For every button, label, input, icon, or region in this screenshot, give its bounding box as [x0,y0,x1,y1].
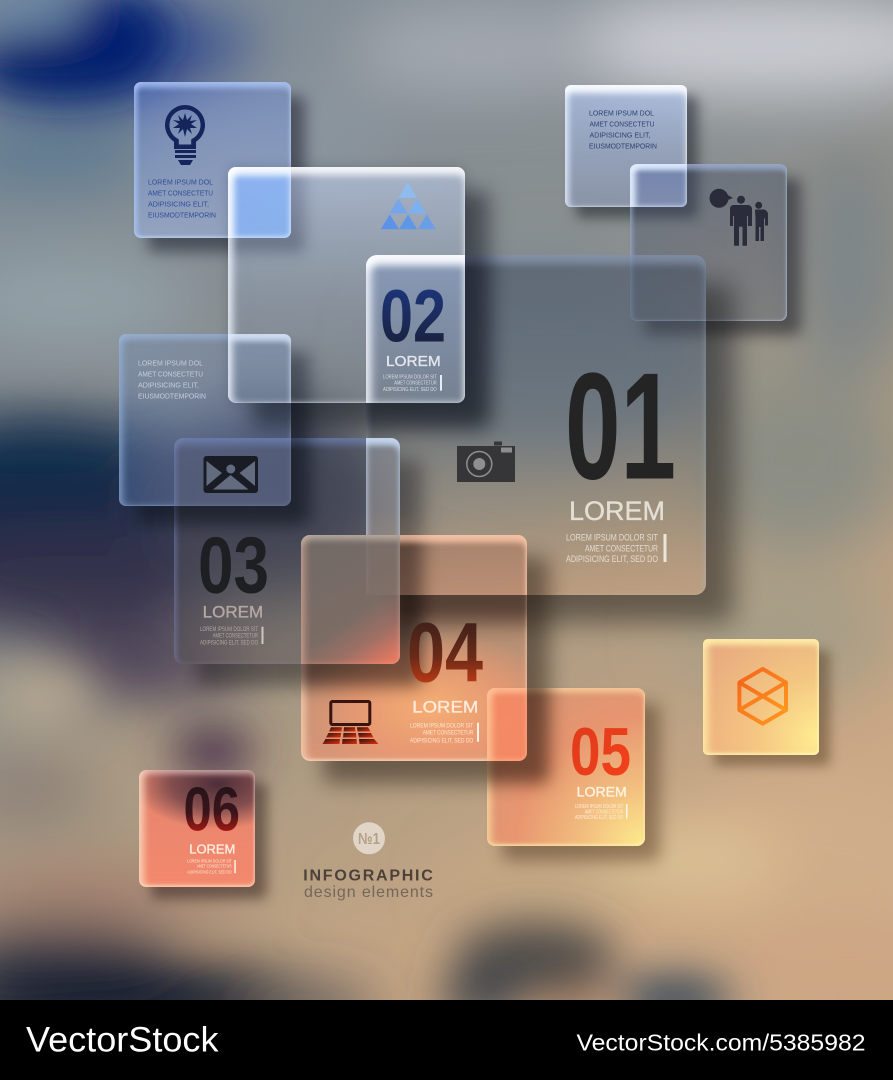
text: left card copy [138,358,206,400]
panel: lightbulb text card [134,82,291,238]
panel: 04 card [301,535,527,761]
number 02: 02 [380,274,446,358]
panel: left text card [119,334,291,506]
badge: number one: №1 [358,831,380,848]
title: infographic design elements [303,868,433,901]
text: 06 copy with bar: LOREM IPSUM DOLOR SIT [187,859,232,865]
overlap: top right card and people card [630,164,687,207]
overlap: 04 card and 05 card [487,688,527,761]
panel: 01 card [366,255,706,595]
icon: laptop [322,702,378,744]
heading: lorem: LOREM [203,604,263,622]
overlap: 03 card and 04 card [301,535,400,664]
number 03: 03 [198,520,269,610]
text: 05 copy with bar: LOREM IPSUM DOLOR SIT [575,804,623,810]
panel: 03 card [174,438,400,664]
footer bar [0,1000,893,1080]
title: infographic design elements: INFOGRAPHIC [303,868,433,885]
overlap: 04 card and 01 card top rim [366,535,527,595]
text: lightbulb card copy: AMET CONSECTETU [148,188,213,198]
text: lightbulb card copy: LOREM IPSUM DOL [148,178,213,186]
heading: lorem: LOREM [412,698,478,717]
overlap: 01 card and 02 card [366,255,465,403]
text: 01 copy with bar [566,532,666,564]
text: top right card copy: AMET CONSECTETU [590,120,654,128]
text: top right card copy: LOREM IPSUM DOL [589,108,654,118]
text: 01 copy with bar: ADIPISICING ELIT, SED DO [566,554,658,564]
icon: people with speech bubble [710,189,768,246]
text: 03 copy with bar: LOREM IPSUM DOLOR SIT [200,627,258,633]
text: 02 copy with bar: AMET CONSECTETUR [394,381,437,387]
text: left card copy: AMET CONSECTETU [138,370,203,378]
icon: envelope [204,456,258,493]
text: 04 copy with bar: LOREM IPSUM DOLOR SIT [410,722,473,729]
title: infographic design elements: design elements [304,884,433,901]
text: 06 copy with bar: ADIPISICING ELIT, SED DO [187,869,232,875]
panel: people card [630,164,787,321]
text: top right card copy: ADIPISICING ELIT, [590,130,650,140]
text: top right card copy: EIUSMODTEMPORIN [589,142,657,150]
text: 03 copy with bar: AMET CONSECTETUR [213,634,258,640]
overlap: left text card and 02 card [228,334,291,403]
icon: camera [457,442,515,482]
text: left card copy: ADIPISICING ELIT, [138,380,199,390]
heading: lorem: LOREM [577,785,627,800]
heading: lorem: LOREM [189,841,235,856]
panel: 02 card [228,167,465,403]
icon: light bulb [165,105,205,165]
heading: lorem: LOREM [569,496,665,526]
text: 04 copy with bar: AMET CONSECTETUR [423,730,474,737]
panel: 05 card [487,688,645,846]
text: lightbulb card copy: EIUSMODTEMPORIN [148,210,216,220]
panel: hexagon card [703,639,819,755]
text: 05 copy with bar: ADIPISICING ELIT, SED DO [575,815,623,821]
number 06: 06 [184,774,240,844]
text: 04 copy with bar: ADIPISICING ELIT, SED DO [410,738,473,745]
badge: number one [353,822,385,854]
icon: triangle pyramid [381,182,436,229]
panel: 06 card [139,770,255,887]
text: 03 copy with bar [200,627,264,646]
text: lightbulb card copy: ADIPISICING ELIT, [148,200,209,208]
overlap: left text card and 03 card [174,438,291,506]
text: 02 copy with bar: LOREM IPSUM DOLOR SIT [383,374,437,380]
text: 01 copy with bar: AMET CONSECTETUR [585,544,658,554]
text: 05 copy with bar: AMET CONSECTETUR [585,810,624,816]
footer image id: VectorStock.com/5385982 [576,1030,866,1056]
text: left card copy: LOREM IPSUM DOL [138,358,203,368]
number 05: 05 [570,715,631,790]
text: 05 copy with bar [575,804,628,821]
text: lightbulb card copy [148,178,216,220]
text: left card copy: EIUSMODTEMPORIN [138,392,206,400]
panel: top right text card [565,85,687,207]
text: 06 copy with bar [187,859,236,875]
overlap: 01 card and 03 card [366,438,400,595]
number 04: 04 [407,606,483,700]
text: 01 copy with bar: LOREM IPSUM DOLOR SIT [566,532,658,542]
number 01: 01 [565,342,676,512]
text: 02 copy with bar: ADIPISICING ELIT, SED DO [383,387,437,393]
overlap: bulb card and 02 card [228,167,291,238]
text: 02 copy with bar [383,374,442,393]
text: 03 copy with bar: ADIPISICING ELIT, SED DO [200,640,258,646]
text: 06 copy with bar: AMET CONSECTETUR [197,864,232,870]
footer logo: VectorStock [26,1020,219,1060]
text: 04 copy with bar [410,722,479,745]
heading: lorem: LOREM [386,353,441,370]
text: top right card copy [589,108,657,150]
icon: hexagon box [739,669,786,724]
